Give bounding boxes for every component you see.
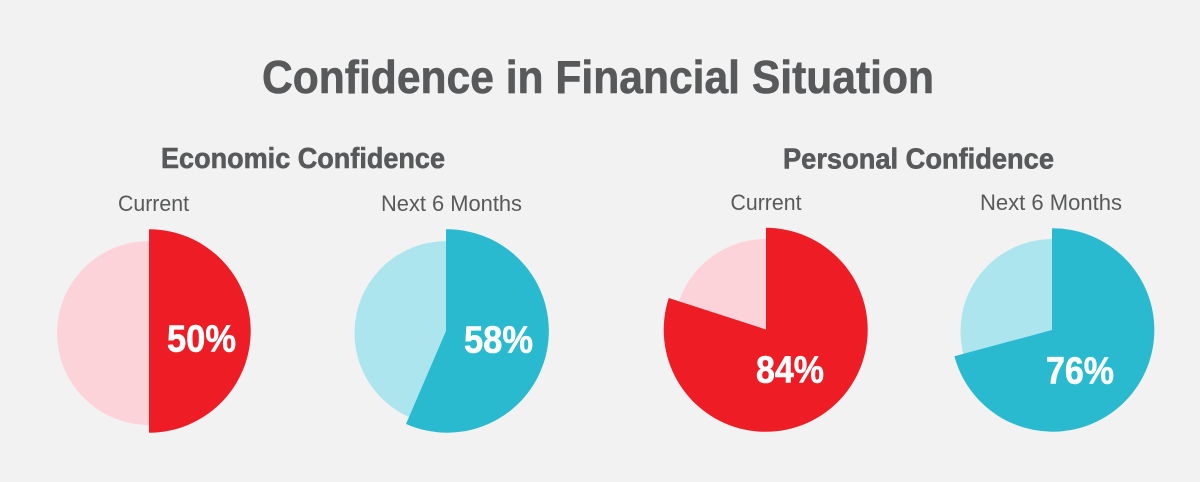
label: economic next 6 months: Next 6 Months [381,191,522,216]
panel: personal confidence [664,144,1154,432]
pie chart: economic current 50%: 50% [167,318,236,360]
heading: personal confidence: Personal Confidence [783,144,1054,176]
pie chart: personal next 6 months 76%: 76% [1046,350,1114,392]
pie chart: personal current 84%: 84% [756,350,824,392]
pie chart: personal current 84% [664,228,868,432]
label: economic current: Current [118,191,190,216]
label: personal current: Current [730,190,802,215]
pie chart: economic current 50% [57,229,251,433]
heading: economic confidence: Economic Confidence [161,143,445,175]
label: personal next 6 months: Next 6 Months [980,190,1122,215]
title: Confidence in Financial Situation [262,51,934,103]
pie chart: economic next 6 months 58% [354,229,549,433]
pie chart: personal next 6 months 76% [954,228,1154,432]
pie chart: economic next 6 months 58%: 58% [464,320,533,362]
panel: economic confidence [57,143,549,433]
